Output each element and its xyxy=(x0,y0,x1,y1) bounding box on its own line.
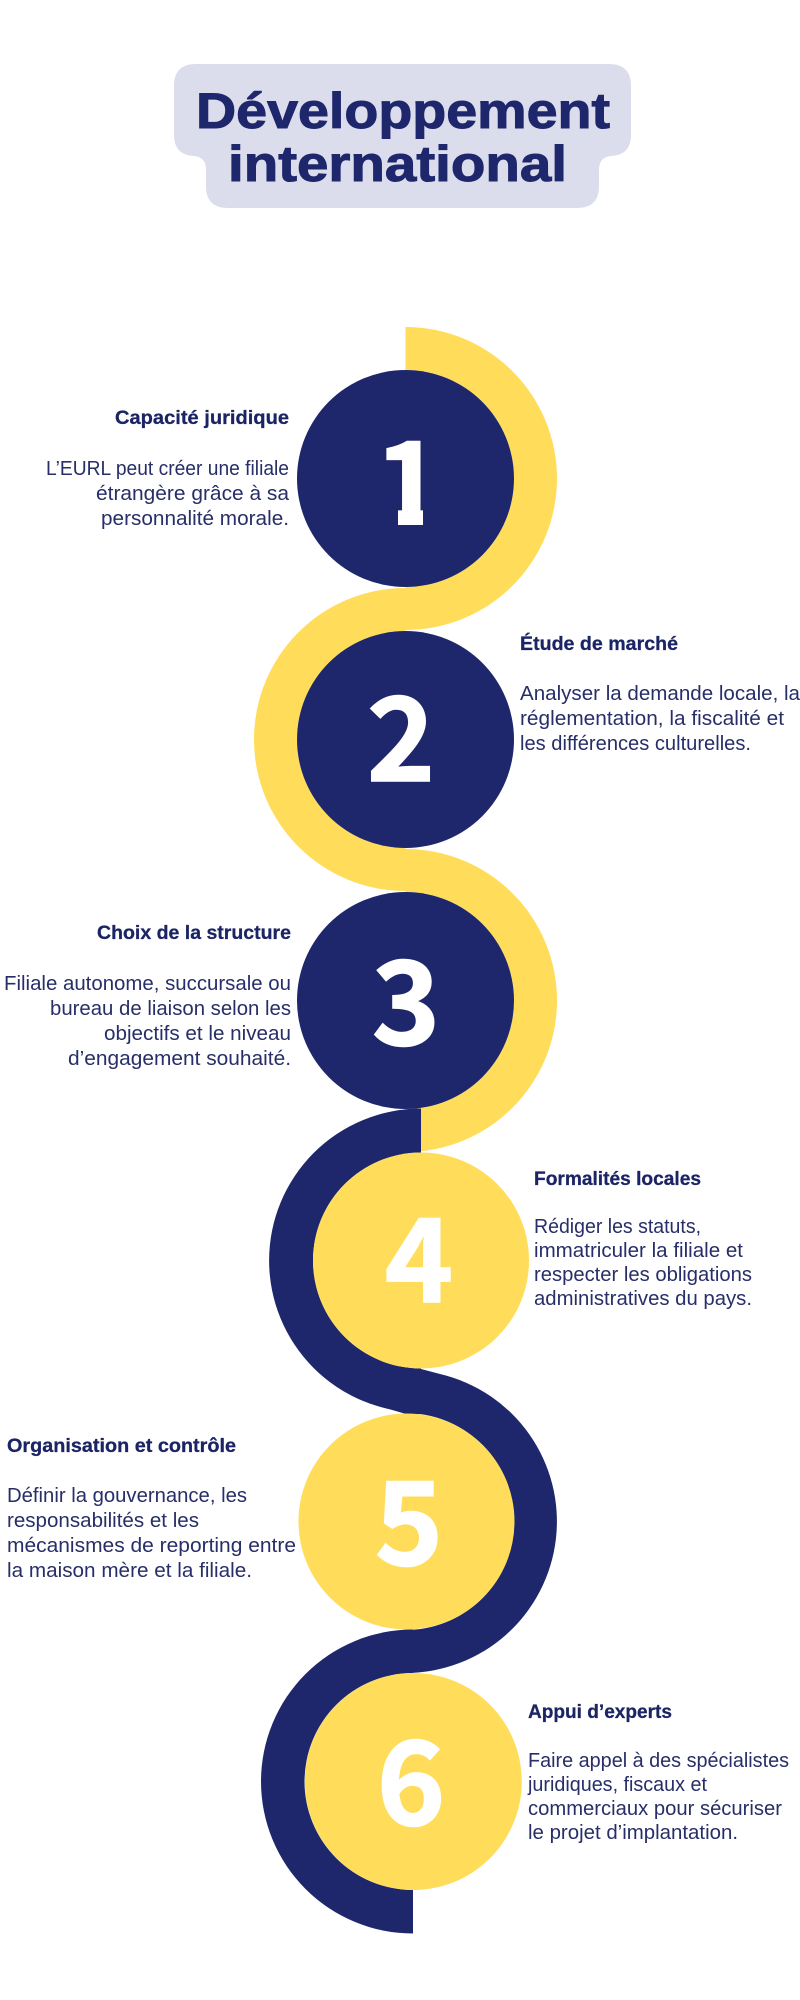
number 5: 5 xyxy=(375,1431,443,1599)
step 5: organisation et contrôle xyxy=(7,1369,557,1673)
step 2: étude de marché xyxy=(254,588,800,891)
text block 1: personnalité morale. xyxy=(101,508,289,530)
text block 4: respecter les obligations xyxy=(534,1264,752,1286)
number 4: 4 xyxy=(385,1168,453,1336)
text block 1: Capacité juridique xyxy=(115,408,289,429)
title text: international xyxy=(228,136,567,192)
circle 5 xyxy=(298,1414,514,1630)
text block 2 xyxy=(520,633,800,755)
circle 6 xyxy=(305,1673,522,1890)
title xyxy=(174,64,631,208)
text block 1: étrangère grâce à sa xyxy=(96,483,290,505)
title text xyxy=(196,83,610,192)
step 1: capacité juridique xyxy=(46,327,557,630)
text block 6: juridiques, fiscaux et xyxy=(527,1774,707,1796)
text block 6: Appui d’experts xyxy=(528,1702,672,1723)
text block 6: le projet d’implantation. xyxy=(528,1822,738,1844)
text block 6 xyxy=(527,1702,789,1844)
text block 5: mécanismes de reporting entre xyxy=(7,1535,296,1557)
text block 6: commerciaux pour sécuriser xyxy=(528,1798,782,1820)
ribbon 3 xyxy=(406,849,557,1152)
text block 3: objectifs et le niveau xyxy=(104,1023,291,1045)
text block 4: administratives du pays. xyxy=(534,1288,752,1310)
text block 2: réglementation, la fiscalité et xyxy=(520,708,784,730)
text block 3: bureau de liaison selon les xyxy=(50,998,291,1020)
text block 6: Faire appel à des spécialistes xyxy=(528,1750,789,1772)
text block 3: Filiale autonome, succursale ou xyxy=(4,973,291,995)
ribbon 6 xyxy=(261,1630,413,1934)
number 3: 3 xyxy=(372,911,440,1079)
text block 2: Étude de marché xyxy=(520,633,678,655)
text block 4: Formalités locales xyxy=(534,1169,701,1190)
text block 3: d’engagement souhaité. xyxy=(68,1048,291,1070)
circle 2 xyxy=(297,631,514,848)
text block 5: Organisation et contrôle xyxy=(7,1436,236,1457)
step 3: choix de la structure xyxy=(4,849,557,1152)
ribbon 4 xyxy=(269,1108,421,1412)
text block 2: Analyser la demande locale, la xyxy=(520,683,800,705)
circle 3 xyxy=(297,892,514,1109)
text block 5 xyxy=(7,1436,296,1582)
text block 5: responsabilités et les xyxy=(7,1510,199,1532)
text block 2: les différences culturelles. xyxy=(520,733,751,755)
number 1: 1 xyxy=(375,391,443,559)
ribbon 1 xyxy=(406,327,557,630)
step 4: formalités locales xyxy=(269,1108,752,1412)
number 6: 6 xyxy=(377,1691,445,1859)
text block 1 xyxy=(46,408,290,530)
title background badge xyxy=(174,64,631,208)
text block 4 xyxy=(534,1169,752,1310)
text block 4: Rédiger les statuts, xyxy=(534,1216,701,1238)
text block 3 xyxy=(4,923,291,1070)
text block 5: la maison mère et la filiale. xyxy=(7,1560,252,1582)
text block 5: Définir la gouvernance, les xyxy=(7,1485,247,1507)
title text: Développement xyxy=(196,83,610,139)
ribbon 5 xyxy=(370,1369,557,1673)
circle 1 xyxy=(297,370,514,587)
text block 4: immatriculer la filiale et xyxy=(534,1240,743,1262)
ribbon 2 xyxy=(254,588,406,891)
text block 1: L’EURL peut créer une filiale xyxy=(46,458,289,480)
circle 4 xyxy=(313,1152,529,1368)
text block 3: Choix de la structure xyxy=(97,923,291,944)
number 2: 2 xyxy=(367,647,435,815)
step 6: appui d'experts xyxy=(261,1630,789,1934)
